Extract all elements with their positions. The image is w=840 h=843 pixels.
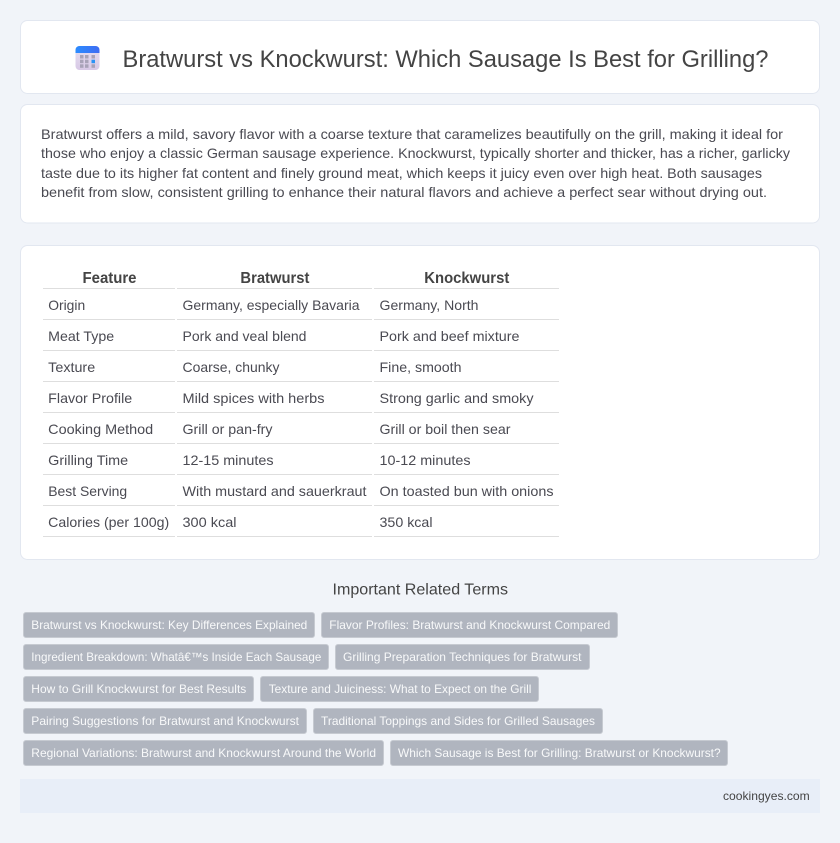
table row: calories: 350 kcal [380, 514, 432, 530]
table row: cooking method [43, 421, 559, 444]
table row: flavor profile: Strong garlic and smoky [380, 390, 534, 406]
tag [336, 644, 590, 670]
table row: texture [43, 359, 559, 382]
tag: Flavor Profiles: Bratwurst and Knockwurst Compared [329, 618, 610, 632]
text block: introduction [41, 126, 790, 200]
tag [24, 740, 384, 766]
title: Bratwurst vs Knockwurst: Which Sausage Is Best for Grilling? [122, 46, 768, 73]
table row: grilling time: 10-12 minutes [380, 452, 470, 468]
table row: best serving [43, 483, 559, 506]
table row: calories [43, 514, 559, 537]
tag: Regional Variations: Bratwurst and Knockwurst Around the World [31, 746, 376, 760]
table row: texture: Coarse, chunky [182, 359, 280, 375]
table header: Feature [82, 270, 137, 287]
tag: How to Grill Knockwurst for Best Results [31, 682, 246, 696]
table row: cooking method: Grill or pan-fry [182, 421, 272, 437]
footer [20, 779, 820, 813]
text block: introduction: those who enjoy a classic German sausage experience. Knockwurst, typically shorter and thicker, has a richer, garlicky [41, 145, 790, 161]
table row: grilling time: Grilling Time [48, 452, 128, 468]
text block: introduction: benefit from slow, consistent grilling to enhance their natural flavors and achieve a perfect sear without drying out. [41, 184, 767, 200]
table row: best serving: On toasted bun with onions [380, 483, 554, 499]
tag [24, 612, 314, 638]
table row: origin [43, 297, 559, 320]
table row: grilling time [43, 452, 559, 475]
tag: Traditional Toppings and Sides for Grilled Sausages [321, 714, 595, 728]
table row: flavor profile: Mild spices with herbs [182, 390, 324, 406]
table row: origin: Origin [48, 297, 85, 313]
tag [322, 612, 618, 638]
icon: calendar [76, 46, 100, 70]
table header: Knockwurst [424, 270, 510, 287]
table row: cooking method: Cooking Method [48, 421, 153, 437]
tag [24, 708, 306, 734]
table row: calories: 300 kcal [182, 514, 236, 530]
text block: introduction: taste due to its higher fat content and finely ground meat, which keeps it juicy even over high heat. Both sausages [41, 165, 762, 181]
text block: introduction: Bratwurst offers a mild, savory flavor with a coarse texture that caramelizes beautifully on the grill, making it ideal for [41, 126, 783, 142]
tag: Which Sausage is Best for Grilling: Bratwurst or Knockwurst? [398, 746, 721, 760]
tag: Pairing Suggestions for Bratwurst and Knockwurst [31, 714, 300, 728]
table row: best serving: With mustard and sauerkraut [182, 483, 367, 499]
table row: meat type: Meat Type [48, 328, 114, 344]
table row: grilling time: 12-15 minutes [182, 452, 274, 468]
panel: comparison table [20, 246, 820, 560]
panel: header [20, 20, 820, 94]
table row: meat type [43, 328, 559, 351]
tag [260, 676, 538, 702]
table header [43, 270, 559, 289]
table row: flavor profile [43, 390, 559, 413]
tag [24, 644, 328, 670]
table row: origin: Germany, especially Bavaria [182, 297, 360, 313]
tag [390, 740, 728, 766]
table row: meat type: Pork and beef mixture [380, 328, 520, 344]
tag: Ingredient Breakdown: Whatâ€™s Inside Each Sausage [31, 650, 322, 664]
table row: cooking method: Grill or boil then sear [380, 421, 511, 437]
table row: origin: Germany, North [380, 297, 478, 313]
table row: meat type: Pork and veal blend [182, 328, 306, 344]
tag: Texture and Juiciness: What to Expect on the Grill [269, 682, 531, 696]
tag: Bratwurst vs Knockwurst: Key Differences Explained [31, 618, 307, 632]
panel: related term tags [24, 612, 728, 766]
tag: Grilling Preparation Techniques for Bratwurst [343, 650, 582, 664]
table header: Bratwurst [240, 270, 310, 287]
table row: best serving: Best Serving [48, 483, 127, 499]
tag [24, 676, 254, 702]
footer: cookingyes.com [723, 789, 810, 803]
panel: introduction [20, 104, 820, 223]
table row: flavor profile: Flavor Profile [48, 390, 132, 406]
tag [314, 708, 602, 734]
table row: texture: Texture [48, 359, 95, 375]
table row: calories: Calories (per 100g) [48, 514, 169, 530]
table row: texture: Fine, smooth [380, 359, 462, 375]
heading: related terms: Important Related Terms [332, 582, 508, 598]
